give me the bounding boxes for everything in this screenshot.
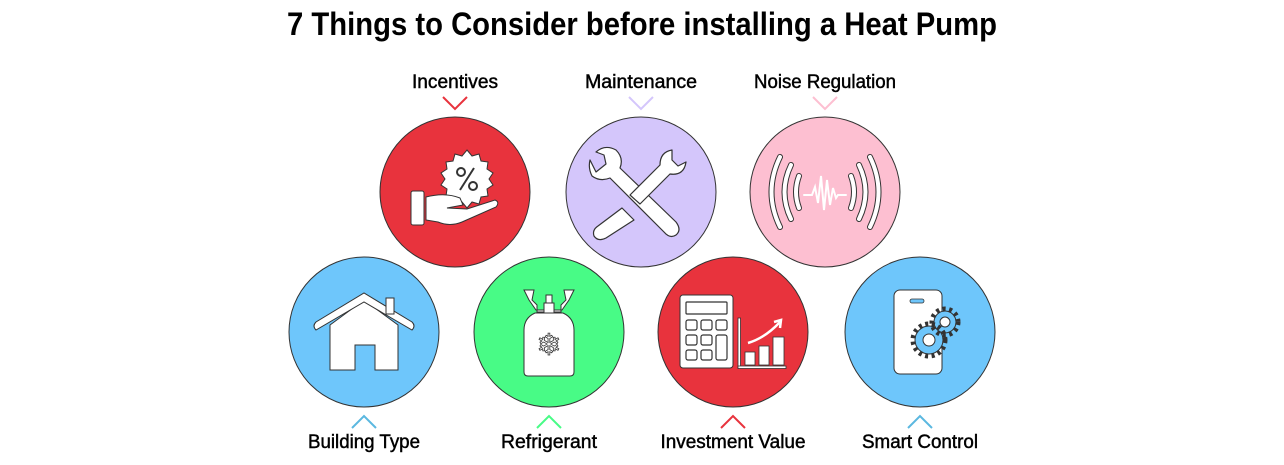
- panel: incentives: [380, 72, 530, 267]
- icon: percent badge hand: [411, 150, 498, 225]
- panel: refrigerant: ❄: [536, 329, 562, 362]
- icon: wrench and screwdriver: [589, 147, 686, 240]
- icon: calculator and chart: [680, 295, 733, 368]
- icon: phone with gears: [894, 290, 942, 374]
- panel: maintenance: Maintenance: [585, 72, 697, 93]
- title: 7 Things to Consider before installing a Heat Pump: [287, 6, 997, 42]
- panel: refrigerant: [474, 257, 624, 453]
- panel: smart control: [845, 257, 995, 453]
- icon: house: [314, 293, 414, 370]
- panel: noise regulation: [750, 72, 900, 267]
- panel: investment value: Investment Value: [660, 432, 806, 453]
- icon: refrigerant tank: [524, 290, 574, 376]
- icon: sound wave: [772, 157, 878, 227]
- panel: maintenance: [566, 72, 716, 267]
- panel: smart control: Smart Control: [862, 432, 978, 453]
- panel: noise regulation: Noise Regulation: [754, 72, 896, 93]
- panel: investment value: [658, 257, 808, 453]
- panel: refrigerant: Refrigerant: [501, 432, 598, 453]
- panel: building type: Building Type: [308, 432, 420, 453]
- panel: incentives: Incentives: [412, 72, 498, 93]
- panel: building type: [289, 257, 439, 453]
